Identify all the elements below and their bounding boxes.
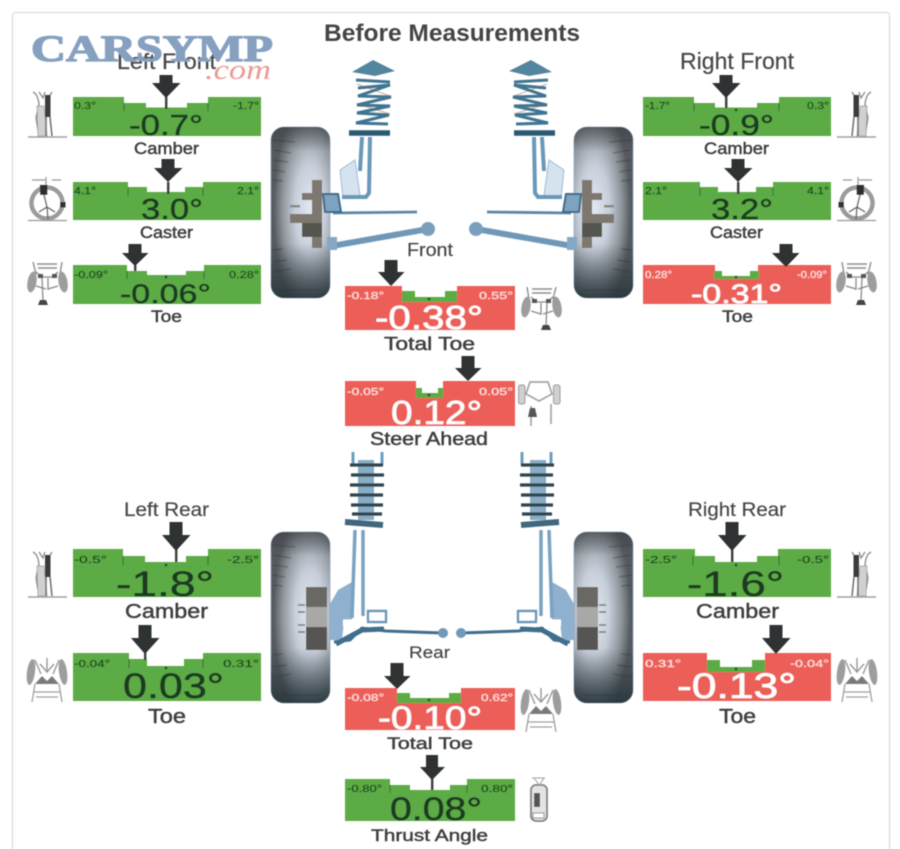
panel: rear total toe: 0.62° [481,692,513,704]
panel: thrust angle: -0.80° [347,783,382,795]
panel: left front caster: 4.1° [74,185,96,197]
caption: Toe [722,308,753,326]
arrow [718,522,746,551]
caption: Thrust Angle [371,826,488,845]
panel: steer ahead [345,356,560,449]
caption: Camber [125,601,208,623]
panel: steer ahead: 0.12° [391,394,482,431]
panel: right front camber: -0.9° [699,110,774,142]
panel: right front camber [643,75,876,158]
panel: front total toe: 0.55° [479,290,513,302]
panel: left rear toe [25,625,261,728]
panel: left rear camber: -1.8° [116,565,214,604]
panel: right rear toe: -0.13° [677,667,796,706]
panel: left front caster: 2.1° [237,185,259,197]
panel: steer ahead: 0.05° [479,386,513,398]
panel: right front toe [643,244,878,326]
heading: Left Rear: Left Rear [124,500,210,521]
panel: left front toe: -0.09° [74,269,108,281]
arrow [762,625,790,654]
label: Front: Front [407,240,453,260]
panel: front total toe: -0.18° [347,290,384,302]
panel: right rear camber [643,522,876,623]
panel: front total toe [345,260,563,354]
front suspension: right [469,60,633,298]
caption: Camber [696,601,779,623]
front suspension: left [271,60,435,298]
panel: left front camber: 0.3° [74,100,96,112]
panel: left front caster: 3.0° [141,194,203,226]
panel: left rear toe: 0.31° [223,658,259,670]
panel: left front camber [28,75,261,158]
panel: right rear toe [643,625,879,728]
panel: thrust angle: 0.08° [390,791,482,827]
caption: Camber [704,140,770,158]
panel: thrust angle: 0.80° [481,783,513,795]
arrow [162,522,190,551]
arrow [378,260,404,286]
panel: rear total toe: -0.10° [378,700,482,736]
panel: right front toe: 0.28° [645,269,672,281]
panel: left front toe: 0.28° [229,269,259,281]
arrow [772,244,800,267]
panel: steer ahead: -0.05° [347,386,384,398]
panel: right front caster [643,159,876,242]
label: Rear: Rear [409,643,450,662]
caption: Caster [710,224,764,242]
title: Before Measurements [324,20,580,47]
rear suspension: left [271,452,448,703]
panel: right front camber: -1.7° [645,100,670,112]
arrow [455,356,482,381]
caption: Toe [719,706,756,728]
panel: left front toe: -0.06° [120,279,211,309]
panel: left rear camber [28,522,261,623]
panel: left rear toe: 0.03° [123,667,224,706]
caption: Total Toe [387,734,473,753]
panel: right front caster: 3.2° [711,194,773,226]
caption: Total Toe [384,334,475,354]
watermark logo [31,29,273,86]
watermark logo: .com [205,54,271,86]
panel: right front camber: 0.3° [807,100,829,112]
panel: left front toe [26,244,261,326]
panel: left front caster [28,159,261,242]
rear suspension: right [456,452,633,703]
arrow [152,75,180,98]
arrow [122,244,148,266]
panel: right rear toe: -0.04° [790,658,829,670]
panel: rear total toe [345,663,563,753]
panel: thrust angle [345,755,547,845]
panel: right front caster: 4.1° [807,185,829,197]
heading: Right Front: Right Front [680,48,795,74]
caption: Caster [140,224,194,242]
caption: Steer Ahead [370,429,488,449]
panel: front total toe: -0.38° [375,299,483,336]
panel: right front caster: 2.1° [645,185,667,197]
panel: left front camber: -1.7° [233,100,259,112]
arrow [384,663,410,689]
panel: right rear camber: -2.5° [645,554,677,566]
panel: right front toe: -0.09° [797,269,827,281]
heading: Right Rear: Right Rear [688,500,787,521]
panel: rear total toe: -0.08° [347,692,384,704]
arrow [131,625,160,654]
caption: Camber [134,140,200,158]
panel: right front toe: -0.31° [691,279,782,309]
arrow [712,75,740,98]
panel: left rear camber: -2.5° [227,554,259,566]
caption: Toe [151,308,182,326]
arrow [724,159,752,182]
panel: left rear camber: -0.5° [74,554,107,566]
panel: left front camber: -0.7° [129,110,203,142]
caption: Toe [148,706,186,728]
arrow [420,755,445,780]
panel: right rear camber: -0.5° [797,554,829,566]
panel: right rear camber: -1.6° [687,565,784,604]
watermark logo: CARSYMP [31,29,273,70]
panel: right rear toe: 0.31° [645,658,681,670]
panel: left rear toe: -0.04° [74,658,110,670]
heading: Left Front: Left Front [117,49,216,74]
arrow [154,159,182,182]
